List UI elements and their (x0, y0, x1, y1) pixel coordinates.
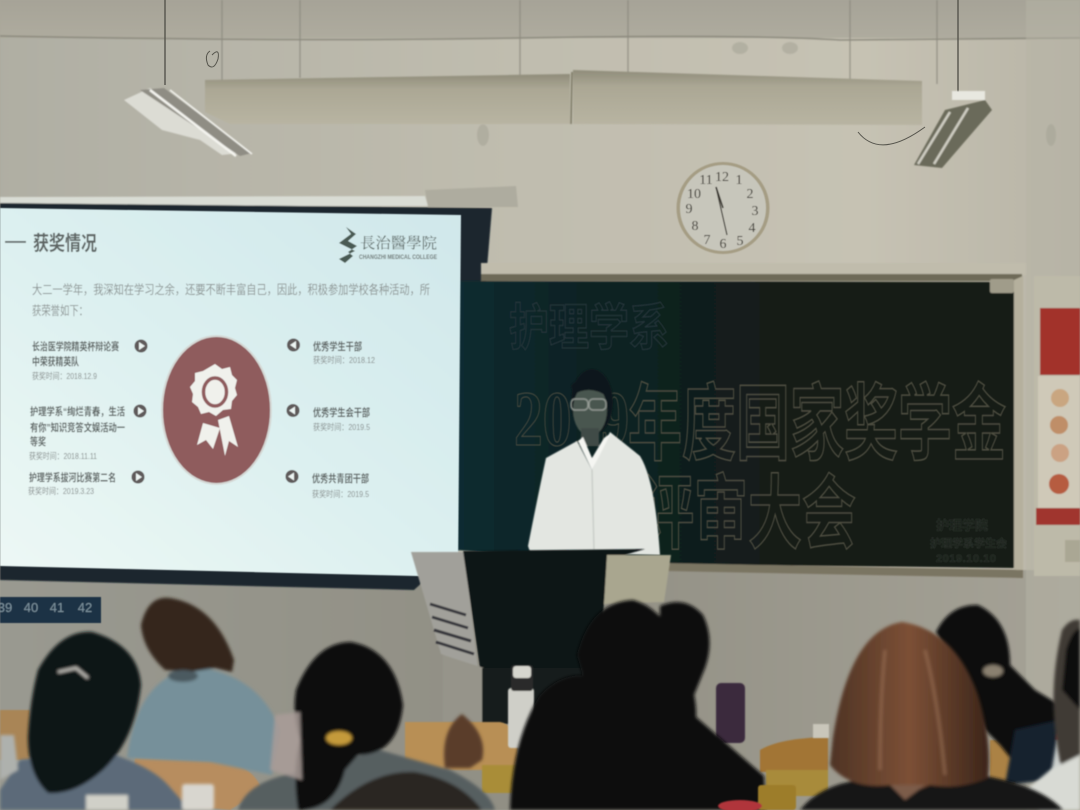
projected slide (0, 208, 461, 577)
ceiling hanging wires (165, 0, 958, 145)
award list: left column: 护理学系“绚烂青春，生活 (30, 405, 125, 418)
wall clock: 4 (748, 221, 756, 236)
college logo (339, 227, 438, 263)
wall clock: 6 (720, 237, 726, 252)
chalk title on blackboard: 评审大会 (640, 469, 856, 560)
audience: water bottles (508, 665, 1075, 788)
wall clock: 10 (687, 187, 701, 202)
arrow bullets: right (286, 338, 300, 483)
audience: brown-haired student (800, 622, 1063, 810)
seat number strip: 42 (78, 600, 92, 615)
college logo: 長治醫學院 (360, 235, 437, 252)
award list: right column: 优秀学生会干部 (313, 406, 370, 419)
award list: right column (312, 340, 375, 499)
award list: left column (28, 340, 125, 496)
wall clock: 11 (699, 173, 713, 188)
award list: left column: 等奖 (30, 435, 46, 448)
audience: centre student with long hair (510, 600, 766, 810)
wall clock: 2 (746, 187, 754, 202)
audience: blue top student (127, 598, 280, 775)
award list: left column: 获奖时间：2018.11.11 (29, 451, 97, 461)
college logo: CHANGZHI MEDICAL COLLEGE (359, 254, 438, 261)
arrow bullets: left (132, 340, 148, 484)
award list: left column: 中荣获精英队 (32, 355, 79, 368)
presenter (528, 369, 660, 555)
blackboard (456, 263, 1026, 578)
chalk title on blackboard: 护理学系学生会 (930, 536, 1007, 550)
wall clock: 8 (692, 219, 698, 234)
central medal badge (162, 336, 271, 484)
award list: right column: 获奖时间：2019.5 (312, 489, 369, 499)
icon: rosette ribbon (190, 364, 238, 456)
rolled projection blinds (205, 70, 922, 125)
chalk title on blackboard: 护理学系 (509, 300, 669, 356)
wall clock: 1 (736, 173, 742, 188)
slide heading: 获奖情况 (33, 232, 97, 255)
award list: left column: 获奖时间：2019.3.23 (28, 486, 94, 496)
award list: right column: 获奖时间：2019.5 (313, 422, 370, 432)
award list: right column: 获奖时间：2018.12 (313, 355, 375, 365)
slide heading (5, 232, 97, 255)
intro paragraph: 大二一学年，我深知在学习之余，还要不断丰富自己，因此，积极参加学校各种活动，所 (32, 282, 430, 297)
audience: right back student (936, 605, 1062, 785)
award list: left column: 长治医学院精英杯辩论赛 (32, 340, 119, 353)
right ceiling light (914, 91, 992, 168)
award list: left column: 有你”知识竞答文娱活动一 (30, 421, 125, 434)
chalk title on blackboard: 2019 (514, 375, 629, 462)
award list: right column: 优秀共青团干部 (312, 472, 369, 485)
award list: left column: 获奖时间：2018.12.9 (32, 371, 97, 381)
intro paragraph: 获荣誉如下： (32, 303, 88, 318)
award list: right column: 优秀学生干部 (313, 340, 362, 353)
wall poster at right (1034, 276, 1080, 576)
wall clock: 5 (736, 234, 744, 249)
left ceiling light (124, 88, 252, 156)
audience: front-left student (0, 632, 214, 810)
wall clock: 3 (752, 204, 758, 219)
chalk title on blackboard: 年度国家奖学金 (628, 377, 1006, 471)
seat number strip: 41 (50, 600, 64, 615)
audience: centre-left student (238, 642, 495, 810)
lectern (411, 549, 671, 725)
projector screen casing (0, 186, 518, 590)
desk items foreground (718, 724, 829, 810)
seat number strip: 40 (24, 600, 38, 615)
wall clock: 7 (704, 233, 710, 248)
hair and face (571, 369, 613, 446)
audience: right edge student (1026, 620, 1080, 810)
chalk title on blackboard: 护理学院 (936, 518, 988, 533)
wall clock: 12 (715, 170, 729, 185)
wooden chairs and desks (0, 710, 1015, 810)
seat number strip (0, 597, 101, 623)
wall clock (676, 162, 770, 254)
chalk title on blackboard (509, 300, 1007, 565)
award list: left column: 护理学系拔河比赛第二名 (29, 471, 116, 484)
white shirt (528, 432, 660, 555)
intro paragraph (32, 282, 430, 318)
wall clock: 9 (686, 202, 692, 217)
chalk title on blackboard: 2019.10.10 (936, 553, 996, 565)
